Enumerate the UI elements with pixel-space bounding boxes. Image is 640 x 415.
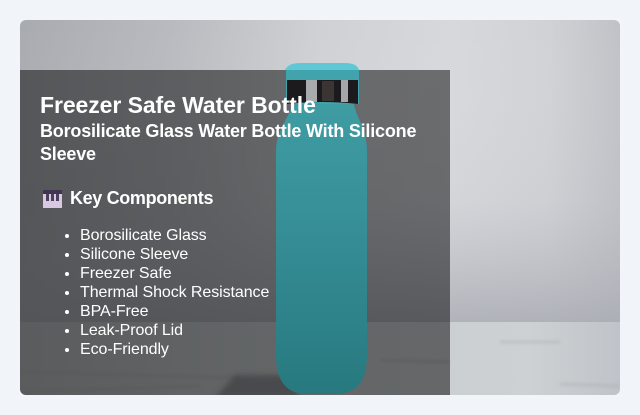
section heading: Key Components xyxy=(70,188,213,208)
list: key components: Borosilicate Glass xyxy=(80,227,207,244)
bottle cap top xyxy=(285,63,359,70)
title: Freezer Safe Water Bottle xyxy=(40,92,316,118)
list: key components: BPA-Free xyxy=(80,303,148,320)
list: key components xyxy=(65,227,269,358)
icon: piano keys xyxy=(43,190,62,208)
list: key components: Leak-Proof Lid xyxy=(80,322,183,339)
list: key components: Thermal Shock Resistance xyxy=(80,284,269,301)
bottle cap lower xyxy=(286,70,359,104)
list: key components: Silicone Sleeve xyxy=(80,246,188,263)
list: key components: Freezer Safe xyxy=(80,265,172,282)
text overlay panel xyxy=(20,70,450,395)
bottle body xyxy=(276,104,367,394)
list: key components: Eco-Friendly xyxy=(80,341,169,358)
subtitle: Borosilicate Glass Water Bottle With Silicone Sleeve xyxy=(40,121,416,164)
metal band xyxy=(287,80,358,104)
